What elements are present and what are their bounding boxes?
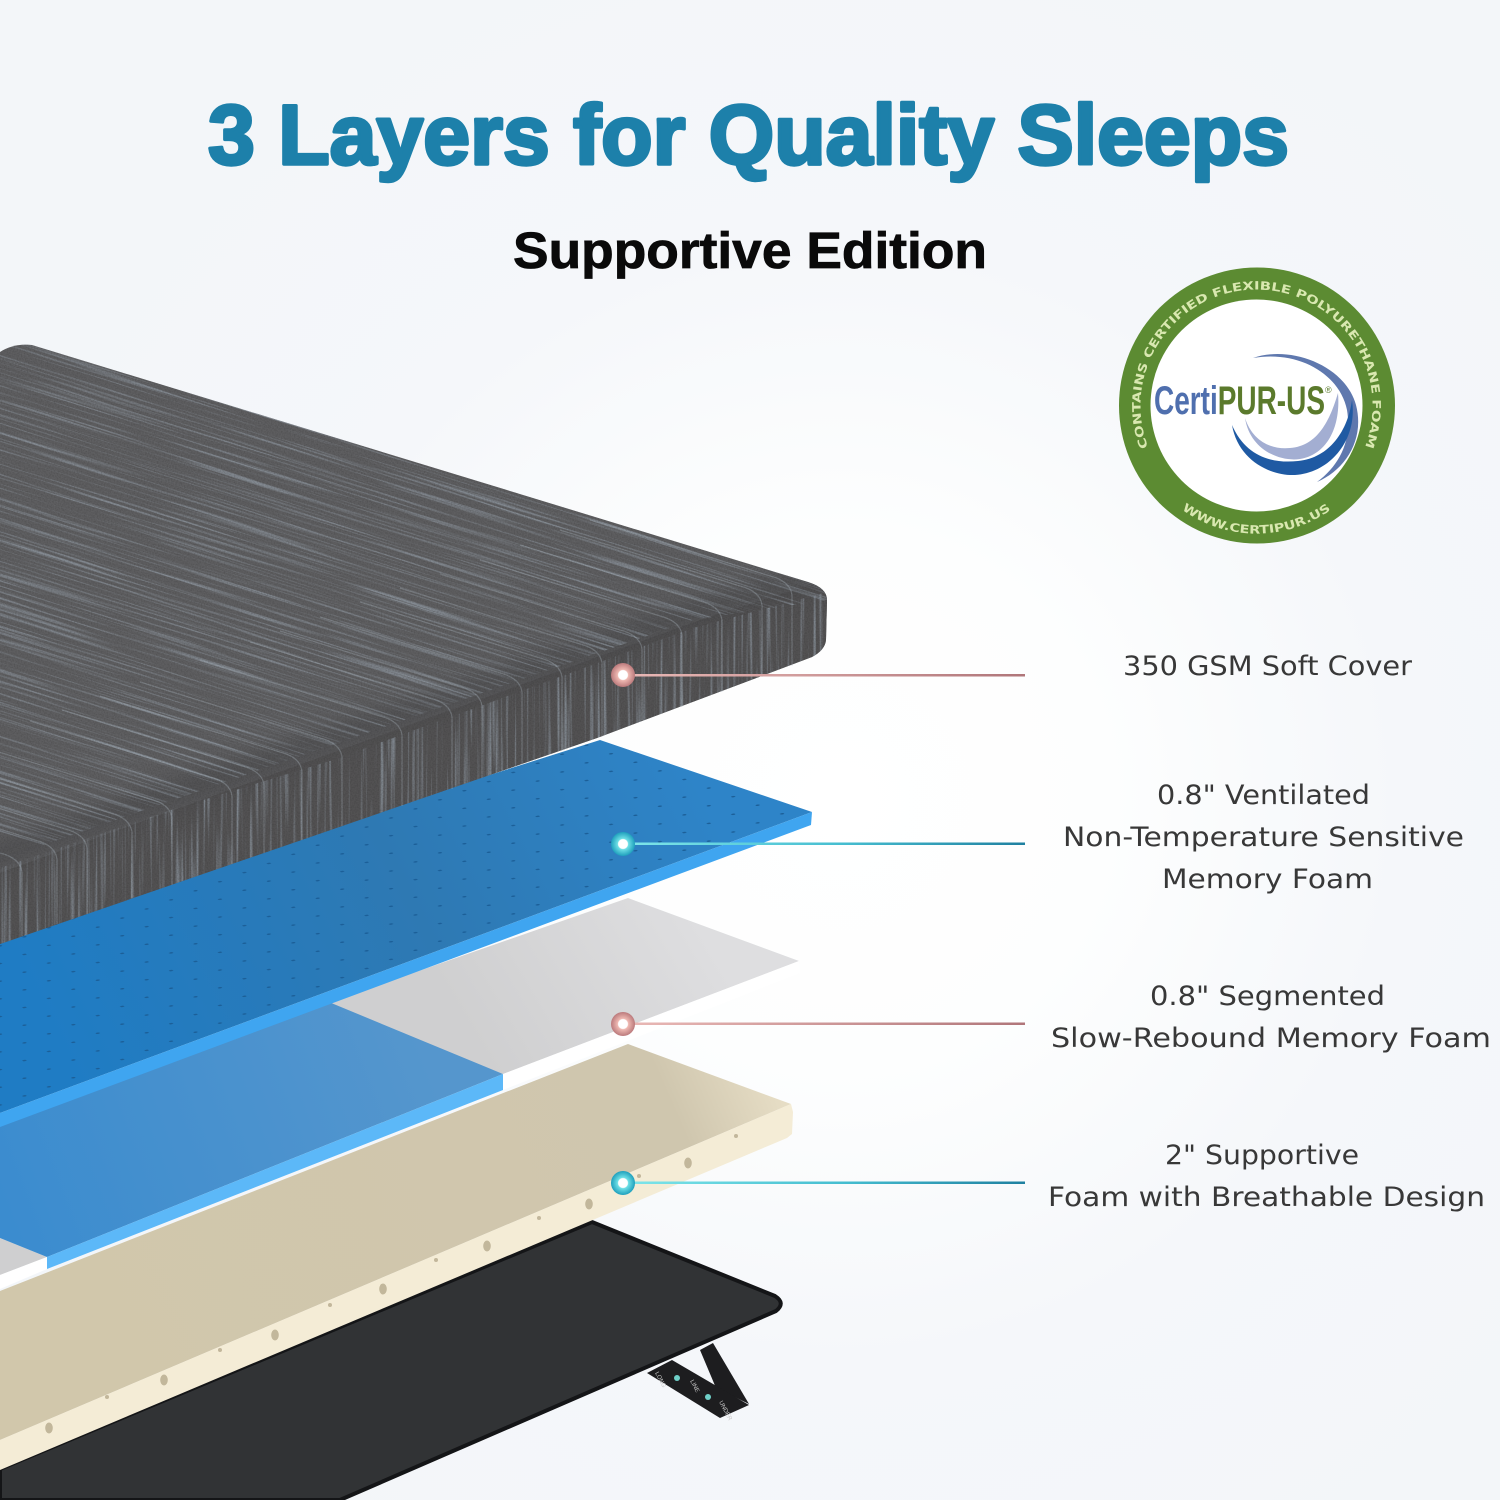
cover top streaks — [0, 345, 827, 845]
badge: CertiPUR-US — [1119, 268, 1395, 544]
label: soft cover: 350 GSM Soft Cover — [1123, 651, 1413, 682]
label: ventilated foam — [1063, 780, 1464, 895]
blue segment centre — [0, 1000, 503, 1269]
cover side streaks — [0, 580, 830, 950]
layer: ventilated blue memory foam — [0, 730, 820, 1127]
label: segmented foam: 0.8" Segmented — [1150, 981, 1385, 1012]
label: supportive foam — [1048, 1140, 1485, 1213]
beige foam holes — [45, 1134, 738, 1434]
label: ventilated foam: Non-Temperature Sensitive — [1063, 822, 1464, 853]
layer: beige supportive foam — [0, 1044, 793, 1470]
cover bent edge threads — [0, 520, 792, 936]
pad strap: UNDER — [717, 1400, 733, 1422]
leader line: soft cover — [611, 663, 1025, 687]
gray segment left — [0, 1238, 47, 1289]
cover grain — [0, 340, 830, 950]
layer: bottom dark pad with straps — [0, 1222, 781, 1500]
pad strap: LONG — [653, 1371, 667, 1389]
label: segmented foam: Slow-Rebound Memory Foam — [1051, 1023, 1491, 1054]
badge swoosh — [1232, 354, 1358, 482]
badge registered mark: ® — [1325, 385, 1332, 395]
label: ventilated foam: 0.8" Ventilated — [1157, 780, 1370, 811]
label: supportive foam: 2" Supportive — [1165, 1140, 1359, 1171]
leader line: segmented foam — [611, 1012, 1025, 1036]
layer: gray fabric cover — [0, 344, 827, 944]
badge ring text: website: WWW.CERTIPUR.US — [1184, 502, 1330, 534]
label: supportive foam: Foam with Breathable Design — [1048, 1182, 1485, 1213]
leader line: ventilated foam — [611, 832, 1025, 856]
pad strap — [647, 1343, 749, 1422]
subtitle: Supportive Edition — [513, 222, 987, 279]
gray segment right — [324, 898, 800, 1090]
leader line: supportive foam — [611, 1171, 1025, 1195]
label: ventilated foam: Memory Foam — [1162, 864, 1373, 895]
cover darker side face — [0, 572, 840, 960]
title: 3 Layers for Quality Sleeps — [208, 88, 1289, 182]
layer: segmented memory foam — [0, 898, 800, 1289]
pad strap: LINE — [688, 1379, 700, 1394]
label: segmented foam — [1051, 981, 1491, 1054]
badge wordmark: CertiPUR-US — [1154, 379, 1325, 423]
badge ring text: contains certified foam: CONTAINS CERTIFIED FLEXIBLE POLYURETHANE FOAM — [1132, 281, 1381, 448]
